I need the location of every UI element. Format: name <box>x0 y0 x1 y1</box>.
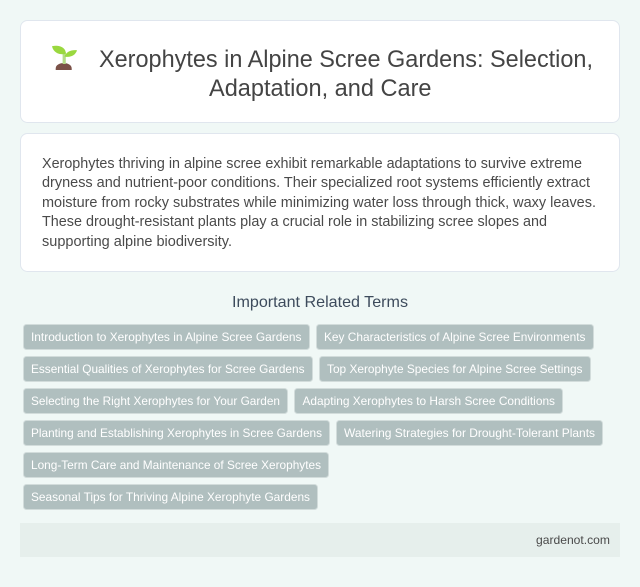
chip <box>24 356 312 382</box>
chip <box>316 324 594 350</box>
chip <box>24 420 330 446</box>
chip: Planting and Establishing Xerophytes in Scree Gardens <box>31 426 322 440</box>
text block: description: dryness and nutrient-poor conditions. Their specialized root systems efficiently extract <box>42 175 590 191</box>
text block: description: Xerophytes thriving in alpine scree exhibit remarkable adaptations to survive extreme <box>42 156 582 172</box>
panel: related term chips <box>24 324 602 510</box>
chip: Key Characteristics of Alpine Scree Environments <box>324 330 586 344</box>
text block: description: These drought-resistant plants play a crucial role in stabilizing scree slopes and <box>42 214 547 230</box>
chip: Long-Term Care and Maintenance of Scree Xerophytes <box>31 458 321 472</box>
panel: title card <box>20 20 620 122</box>
chip <box>24 388 288 414</box>
text block: description <box>42 156 596 250</box>
chip: Introduction to Xerophytes in Alpine Scree Gardens <box>31 330 302 344</box>
text block: description: moisture from rocky substrates while minimizing water loss through thick, waxy leaves. <box>42 195 596 211</box>
chip: Top Xerophyte Species for Alpine Scree Settings <box>327 362 582 376</box>
title: Xerophytes in Alpine Scree Gardens: Selection, <box>99 46 593 73</box>
title <box>99 46 593 102</box>
footer <box>20 523 620 557</box>
chip <box>336 420 602 446</box>
chip: Essential Qualities of Xerophytes for Scree Gardens <box>31 362 304 376</box>
text block: description: supporting alpine biodiversity. <box>42 234 232 250</box>
chip: Seasonal Tips for Thriving Alpine Xerophyte Gardens <box>31 490 310 504</box>
chip: Watering Strategies for Drought-Tolerant Plants <box>344 426 595 440</box>
footer: gardenot.com <box>536 533 610 547</box>
chip <box>320 356 590 382</box>
icon: sprout <box>52 46 77 70</box>
chip: Selecting the Right Xerophytes for Your Garden <box>31 394 280 408</box>
chip <box>24 324 310 350</box>
chip <box>294 388 562 414</box>
chip <box>24 452 328 478</box>
chip <box>24 484 318 510</box>
title: Adaptation, and Care <box>209 75 432 102</box>
heading: important related terms: Important Related Terms <box>232 294 408 311</box>
chip: Adapting Xerophytes to Harsh Scree Conditions <box>302 394 555 408</box>
panel: description card <box>20 134 620 272</box>
